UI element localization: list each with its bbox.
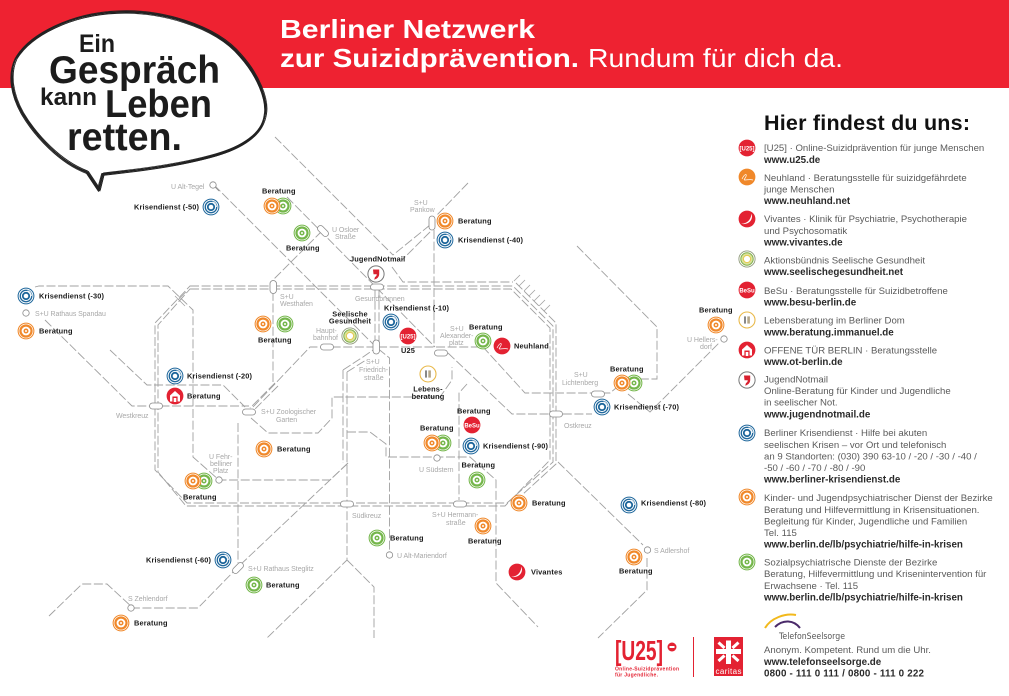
icon group: Beratung Neukölln orange <box>468 518 502 546</box>
icon group: Krisendienst -80: Krisendienst (-80) <box>641 498 707 508</box>
legend heading: Hier findest du uns: <box>764 111 970 135</box>
divider <box>693 637 694 677</box>
station labels: Gesundbrunnen <box>355 296 405 303</box>
legend: Krisendienst <box>739 425 977 486</box>
station labels: Pankow <box>410 207 436 214</box>
icon group: Krisendienst -20: Krisendienst (-20) <box>187 372 253 380</box>
icon group: Beratung Hellersdorf: Beratung <box>699 306 733 314</box>
legend: JugendNotmail: Online-Beratung für Kinder und Jugendliche <box>764 386 951 397</box>
icon group: BeSu: BeSu <box>464 423 480 429</box>
station labels <box>35 184 718 603</box>
icon group: Beratung Tegel <box>262 186 296 214</box>
station labels: U Alt-Mariendorf <box>397 553 447 560</box>
icon group: Beratung Tempelhof <box>369 530 424 546</box>
station labels: Haupt- <box>316 328 337 335</box>
legend: JugendNotmail: JugendNotmail <box>764 374 828 386</box>
icon group: BeSu <box>457 406 491 433</box>
station labels: Alexander- <box>440 333 474 340</box>
icon group: Beratung Kreuzberg: Beratung <box>420 424 454 432</box>
bubble text <box>40 30 220 159</box>
legend: Vivantes: Vivantes · Klinik für Psychiatrie, Psychotherapie <box>764 214 967 225</box>
icon group: Offene Tür Beratung: Beratung <box>187 392 221 400</box>
legend: Offene Tür: www.ot-berlin.de <box>763 357 843 368</box>
legend: Aktionsbündnis: www.seelischegesundheit.net <box>763 267 904 278</box>
icon group: Seelische Gesundheit <box>329 310 371 344</box>
title: Berliner Netzwerk <box>280 14 536 44</box>
icon group: Lebensberatung: beratung <box>412 392 445 401</box>
legend: BeSu: www.besu-berlin.de <box>763 298 857 308</box>
title <box>280 14 843 73</box>
station labels: Südkreuz <box>352 513 382 520</box>
legend: U25: [U25] <box>739 146 755 152</box>
station labels: S+U <box>450 326 464 333</box>
speech bubble <box>10 10 267 192</box>
contact text: www.telefonseelsorge.de <box>763 657 882 668</box>
station labels: S+U <box>280 294 294 301</box>
legend: Sozialpsychiatrische Dienste: www.berlin.de/lb/psychiatrie/hilfe-in-krisen <box>763 592 963 604</box>
icon group: Krisendienst -90 <box>463 438 549 454</box>
station labels: straße <box>364 375 384 382</box>
legend: Neuhland: junge Menschen <box>763 184 834 196</box>
icon group: Beratung Spandau: Beratung <box>39 326 73 336</box>
icon group: Krisendienst -30: Krisendienst (-30) <box>39 292 105 300</box>
legend: Lebensberatung: Lebensberatung im Berliner Dom <box>764 316 905 326</box>
icon group: Seelische Gesundheit: Gesundheit <box>329 317 371 326</box>
legend: Vivantes: www.vivantes.de <box>763 238 843 248</box>
station labels: platz <box>449 340 464 347</box>
icon group: Beratung Pankow <box>437 213 492 229</box>
legend: Krisendienst: an 9 Standorten: (030) 390 63-10 / -20 / -30 / -40 / <box>764 452 977 462</box>
icon group: Krisendienst -20 <box>167 368 253 384</box>
stations <box>23 182 727 611</box>
title: Rundum für dich da. <box>588 43 843 73</box>
icon group: Krisendienst -30 <box>18 288 105 304</box>
header band <box>0 0 1009 88</box>
legend: BeSu: BeSu <box>739 288 755 294</box>
station labels: U Osloer <box>332 227 360 234</box>
legend: Kinder- und Jugendpsychiatrischer Dienst: www.berlin.de/lb/psychiatrie/hilfe-in-krisen <box>763 540 963 550</box>
legend: Sozialpsychiatrische Dienste: Sozialpsychiatrische Dienste der Bezirke <box>764 558 937 568</box>
station labels: Westhafen <box>280 301 313 308</box>
bubble text: Gespräch <box>49 49 220 92</box>
logo: U25: Online-Suizidprävention <box>615 666 679 672</box>
icon group: Lebensberatung: Lebens- <box>413 384 443 394</box>
legend <box>739 140 993 604</box>
station labels: S+U <box>574 372 588 379</box>
station labels: Lichtenberg <box>562 380 598 387</box>
icon group: Beratung Treptow: Beratung <box>532 498 566 508</box>
icon group: U25: U25 <box>401 346 415 355</box>
icon group: Krisendienst -50 <box>134 199 219 215</box>
icon group: Krisendienst -50: Krisendienst (-50) <box>134 202 200 212</box>
legend: Vivantes: und Psychosomatik <box>764 226 847 237</box>
icon group: Beratung Steglitz <box>246 577 300 593</box>
station labels: Westkreuz <box>116 413 149 420</box>
icon group: BeSu: Beratung <box>457 406 491 416</box>
station labels: U Südstern <box>419 467 454 474</box>
icon group: Krisendienst -40: Krisendienst (-40) <box>458 236 524 244</box>
icon group: Krisendienst -80 <box>621 497 707 513</box>
icon group: Beratung Mitte: Beratung <box>469 322 503 332</box>
station labels: S+U Hermann- <box>432 512 479 519</box>
legend: Aktionsbündnis <box>739 251 925 278</box>
legend: JugendNotmail <box>739 372 951 420</box>
contact text: 0800 - 111 0 111 / 0800 - 111 0 222 <box>764 668 925 680</box>
bubble text: retten. <box>67 116 182 159</box>
station labels: S Adlershof <box>654 548 689 555</box>
station labels: U Hellers- <box>687 337 718 344</box>
legend: Aktionsbündnis: Aktionsbündnis Seelische Gesundheit <box>764 256 925 266</box>
icon group: U25 <box>400 328 416 355</box>
logo: TelefonSeelsorge <box>765 615 845 642</box>
icon group: Beratung Mitte <box>469 322 503 349</box>
icon group: Krisendienst -10: Krisendienst (-10) <box>384 304 450 312</box>
icon group: Offene Tür Beratung <box>167 388 221 404</box>
station labels: U Fehr- <box>209 454 233 461</box>
icon group: JugendNotmail: JugendNotmail <box>350 254 405 264</box>
icon group: Vivantes <box>509 564 562 580</box>
icon group: Beratung Lichtenberg <box>610 364 644 391</box>
legend: Krisendienst: www.berliner-krisendienst.de <box>763 474 901 486</box>
icon group: Krisendienst -90: Krisendienst (-90) <box>483 442 549 450</box>
legend: U25 <box>739 140 984 166</box>
icon group: Krisendienst -10 <box>383 304 450 330</box>
legend: Sozialpsychiatrische Dienste <box>739 554 987 604</box>
icon group: Beratung Lichtenberg: Beratung <box>610 364 644 374</box>
icon group: Beratung Reinickendorf <box>286 225 320 252</box>
contact text <box>763 645 931 680</box>
icon group: Neuhland <box>494 338 549 354</box>
icon group: Beratung Kreuzberg <box>420 424 454 451</box>
legend: JugendNotmail: www.jugendnotmail.de <box>763 410 871 420</box>
legend: Kinder- und Jugendpsychiatrischer Dienst: Tel. 115 <box>764 528 797 539</box>
icon group: Beratung Westhafen <box>255 316 293 344</box>
title: zur Suizidprävention. <box>280 43 579 73</box>
icon group: Beratung Charlottenburg <box>256 441 311 457</box>
station labels: Straße <box>335 234 356 241</box>
station labels: Friedrich- <box>359 367 389 374</box>
icon group: Beratung Adlershof: Beratung <box>619 566 653 576</box>
station labels: S+U <box>414 200 428 207</box>
legend: Vivantes <box>739 211 967 248</box>
station labels: U Alt-Tegel <box>171 184 205 191</box>
station labels: S+U <box>366 359 380 366</box>
icon group: Beratung Fehrbelliner Platz <box>183 473 217 502</box>
station labels: Platz <box>213 468 229 475</box>
legend: Krisendienst: seelischen Krisen – vor Ort und telefonisch <box>764 440 946 451</box>
icon group: Beratung Zehlendorf <box>113 615 168 631</box>
station labels: S+U Zoologischer <box>261 409 317 416</box>
legend: Kinder- und Jugendpsychiatrischer Dienst <box>739 489 993 550</box>
contact text: Anonym. Kompetent. Rund um die Uhr. <box>764 645 931 656</box>
icon group: Beratung Adlershof <box>619 549 653 576</box>
icon group: Beratung Tegel: Beratung <box>262 186 296 196</box>
station labels: Ostkreuz <box>564 423 592 430</box>
legend: Sozialpsychiatrische Dienste: Erwachsene · Tel. 115 <box>764 581 858 592</box>
legend: Krisendienst: -50 / -60 / -70 / -80 / -90 <box>764 463 865 474</box>
station labels: S+U Rathaus Spandau <box>35 311 106 318</box>
icon group: Beratung Tempelhof: Beratung <box>390 534 424 542</box>
station labels: dorf <box>700 344 712 351</box>
station labels: S Zehlendorf <box>128 596 168 603</box>
legend: Offene Tür: OFFENE TÜR BERLIN · Beratungsstelle <box>764 346 937 356</box>
legend: JugendNotmail: in seelischer Not. <box>764 398 838 408</box>
icon group: Vivantes: Vivantes <box>531 568 562 576</box>
station labels: S+U Rathaus Steglitz <box>248 566 314 573</box>
TelefonSeelsorge block <box>763 615 931 680</box>
logo: Caritas: caritas <box>716 667 742 676</box>
icon group: Beratung Reinickendorf: Beratung <box>286 244 320 252</box>
legend: Krisendienst: Berliner Krisendienst · Hilfe bei akuten <box>764 428 927 439</box>
icon group: Beratung Zehlendorf: Beratung <box>134 618 168 628</box>
icon group: Neuhland: Neuhland <box>514 342 549 350</box>
station labels: belliner <box>210 461 233 468</box>
station labels: bahnhof <box>313 335 338 342</box>
icon group: U25: [U25] <box>400 334 416 340</box>
icon group: Beratung Hellersdorf <box>699 306 733 333</box>
logo: U25: [U25] <box>615 635 663 666</box>
logo: U25 <box>615 635 679 678</box>
legend: U25: www.u25.de <box>763 155 821 166</box>
legend: Neuhland: Neuhland · Beratungsstelle für suizidgefährdete <box>764 173 967 184</box>
station labels: Garten <box>276 417 297 424</box>
icon group: Beratung Fehrbelliner Platz: Beratung <box>183 492 217 502</box>
icon group: Krisendienst -70 <box>594 399 680 415</box>
icon group: Krisendienst -40 <box>437 232 524 248</box>
legend: Lebensberatung: www.beratung.immanuel.de <box>763 328 894 338</box>
legend: Neuhland: www.neuhland.net <box>763 196 851 207</box>
legend: Kinder- und Jugendpsychiatrischer Dienst: Kinder- und Jugendpsychiatrischer Dienst der Bezirke <box>764 493 993 504</box>
icon group: Beratung Charlottenburg: Beratung <box>277 444 311 454</box>
icon group: Lebensberatung <box>412 366 445 401</box>
bubble text: Leben <box>105 83 212 126</box>
logo: TelefonSeelsorge: TelefonSeelsorge <box>778 632 845 642</box>
icon group: JugendNotmail <box>350 254 405 282</box>
legend: U25: [U25] · Online-Suizidprävention für junge Menschen <box>764 143 984 154</box>
icon group: Krisendienst -60 <box>146 552 231 568</box>
legend: BeSu <box>739 282 948 308</box>
bubble text: kann <box>40 84 97 111</box>
icon group: Beratung Neukölln orange: Beratung <box>468 536 502 546</box>
icon group: Beratung Spandau <box>18 323 73 339</box>
legend: Kinder- und Jugendpsychiatrischer Dienst: Beratung und Hilfevermittlung in Krisensituationen. <box>764 505 979 516</box>
icon group: Beratung Steglitz: Beratung <box>266 580 300 590</box>
icon group: Beratung Neukölln green: Beratung <box>462 460 495 470</box>
icon group: Seelische Gesundheit: Seelische <box>332 310 368 318</box>
icon group: Beratung Treptow <box>511 495 566 511</box>
legend: Kinder- und Jugendpsychiatrischer Dienst: Begleitung für Kinder, Jugendliche und Familien <box>764 516 967 528</box>
icon group: Beratung Westhafen: Beratung <box>258 336 292 344</box>
icon group: Krisendienst -60: Krisendienst (-60) <box>146 556 212 564</box>
legend: Lebensberatung <box>739 312 905 338</box>
legend: Neuhland <box>739 169 967 207</box>
station labels: straße <box>446 520 466 527</box>
legend: BeSu: BeSu · Beratungsstelle für Suizidbetroffene <box>764 286 948 297</box>
legend: Offene Tür <box>739 342 937 368</box>
bubble text: Ein <box>79 30 115 58</box>
legend: Sozialpsychiatrische Dienste: Beratung, Hilfevermittlung und Krisenintervention für <box>764 569 987 580</box>
logo: Caritas <box>714 637 743 676</box>
icon group: Beratung Neukölln green <box>462 460 495 488</box>
icon group: Beratung Pankow: Beratung <box>458 216 492 226</box>
logo: U25: für Jugendliche. <box>615 672 659 678</box>
map: Berlin transit network lines <box>23 137 727 638</box>
icon group: Krisendienst -70: Krisendienst (-70) <box>614 402 680 412</box>
